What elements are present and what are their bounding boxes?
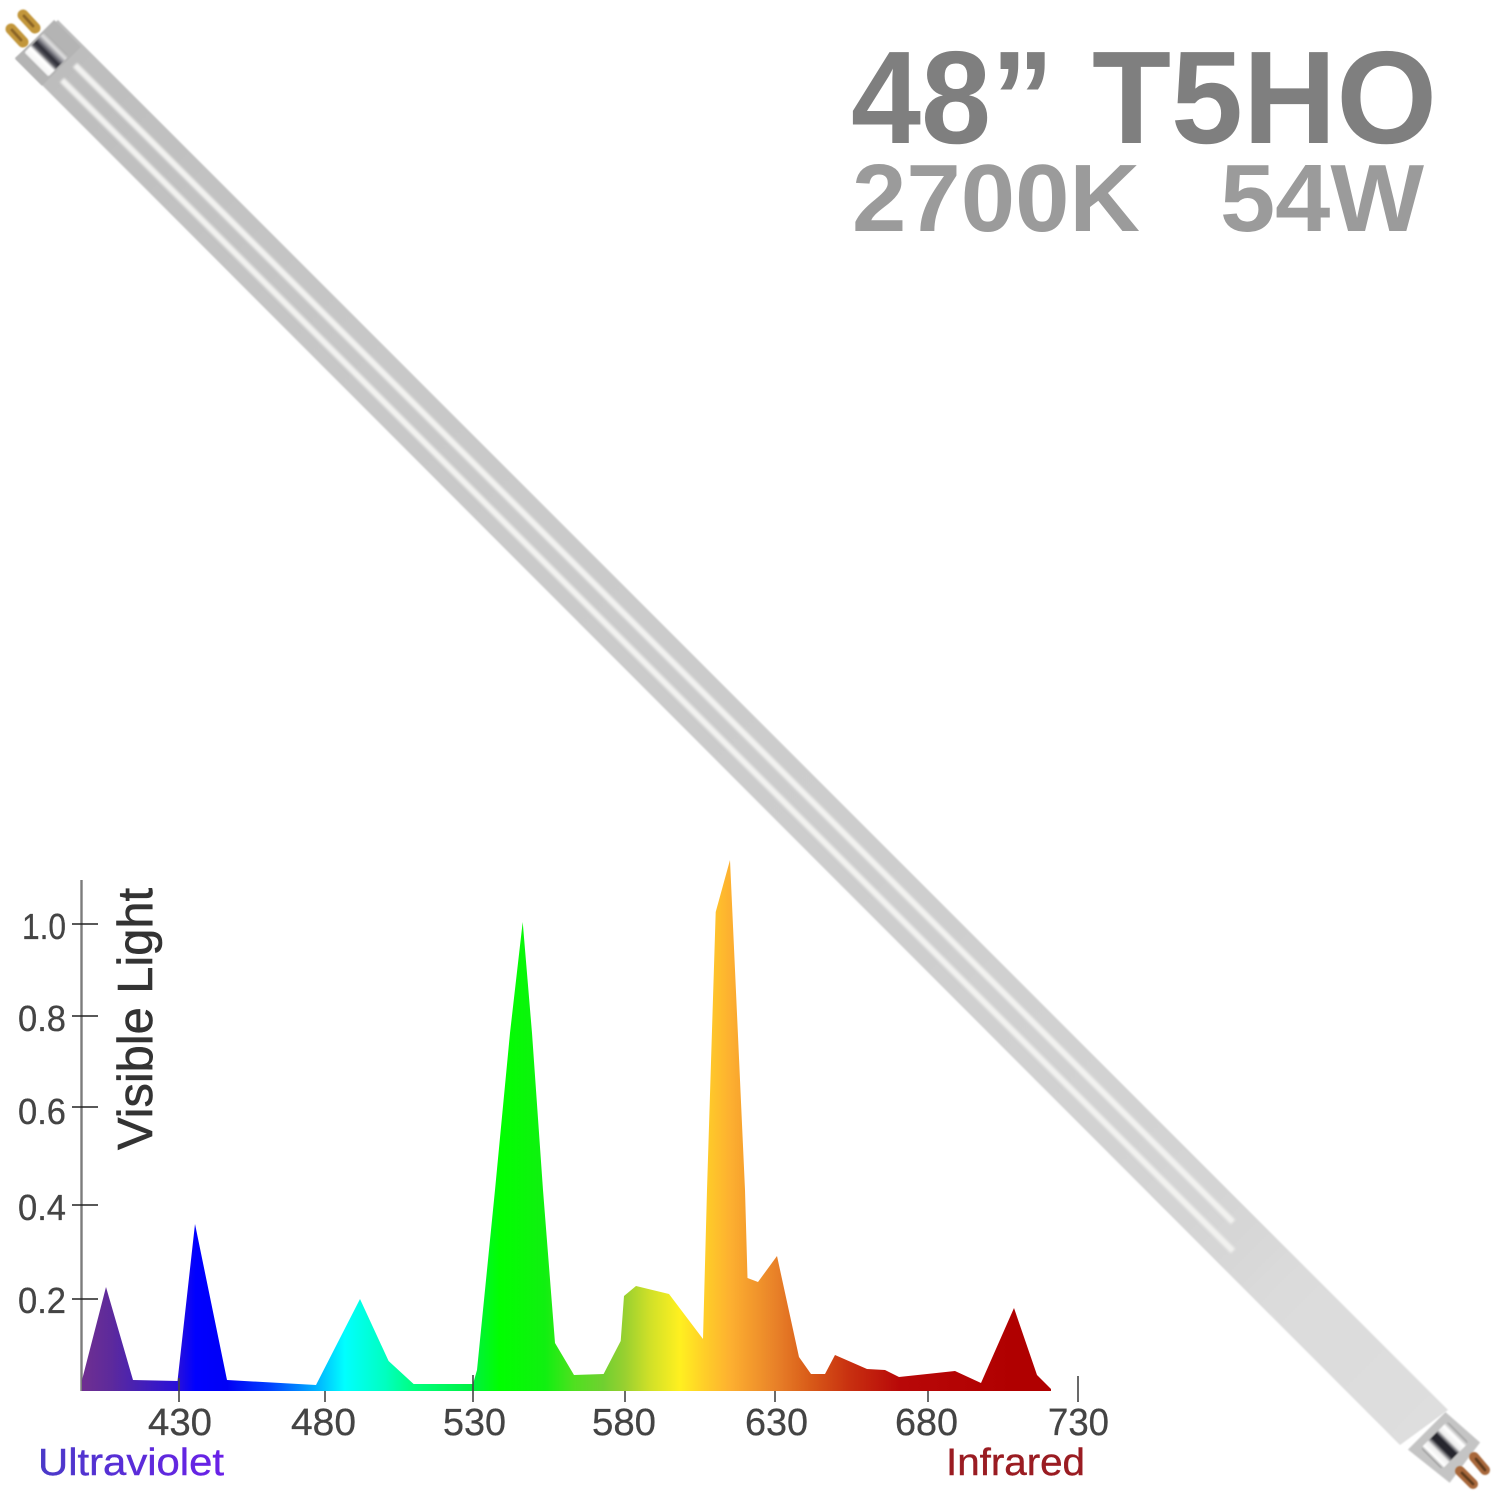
right pins xyxy=(1460,1457,1485,1484)
x axis labels: 630 xyxy=(745,1402,808,1444)
title: lamp length and type xyxy=(851,24,1437,171)
left end cap xyxy=(15,20,81,86)
title: lamp length and type: T5HO xyxy=(1092,24,1437,171)
y axis labels: 0.2 xyxy=(18,1280,66,1321)
y axis labels: 1.0 xyxy=(22,906,66,947)
y axis labels: 0.6 xyxy=(18,1091,66,1132)
x axis labels xyxy=(148,1402,1109,1444)
y axis ticks xyxy=(72,924,98,1299)
ultraviolet label: Ultraviolet xyxy=(38,1442,224,1484)
x axis ticks xyxy=(179,1375,1078,1402)
right end cap xyxy=(1408,1410,1485,1487)
y axis labels: 0.4 xyxy=(18,1187,66,1228)
subtitle: colour temperature and wattage xyxy=(852,145,1424,252)
left pins xyxy=(11,15,35,42)
x axis labels: 430 xyxy=(148,1402,212,1444)
y axis labels: 0.8 xyxy=(18,998,66,1039)
x axis labels: 480 xyxy=(291,1402,356,1444)
x axis labels: 530 xyxy=(443,1402,506,1444)
y axis xyxy=(80,880,83,1391)
spectrum area xyxy=(82,860,1051,1391)
subtitle: colour temperature and wattage: 54W xyxy=(1220,145,1424,252)
spectrum chart xyxy=(18,860,1109,1484)
y axis labels xyxy=(18,906,66,1321)
infrared label: Infrared xyxy=(946,1442,1085,1484)
x axis labels: 730 xyxy=(1048,1402,1109,1444)
y axis title: Visible Light xyxy=(109,888,163,1150)
subtitle: colour temperature and wattage: 2700K xyxy=(852,145,1140,252)
x axis labels: 680 xyxy=(895,1402,958,1444)
x axis labels: 580 xyxy=(592,1402,656,1444)
title: lamp length and type: 48” xyxy=(851,24,1054,171)
upper highlight stripe xyxy=(75,65,1233,1222)
lower highlight stripe xyxy=(62,80,1233,1251)
